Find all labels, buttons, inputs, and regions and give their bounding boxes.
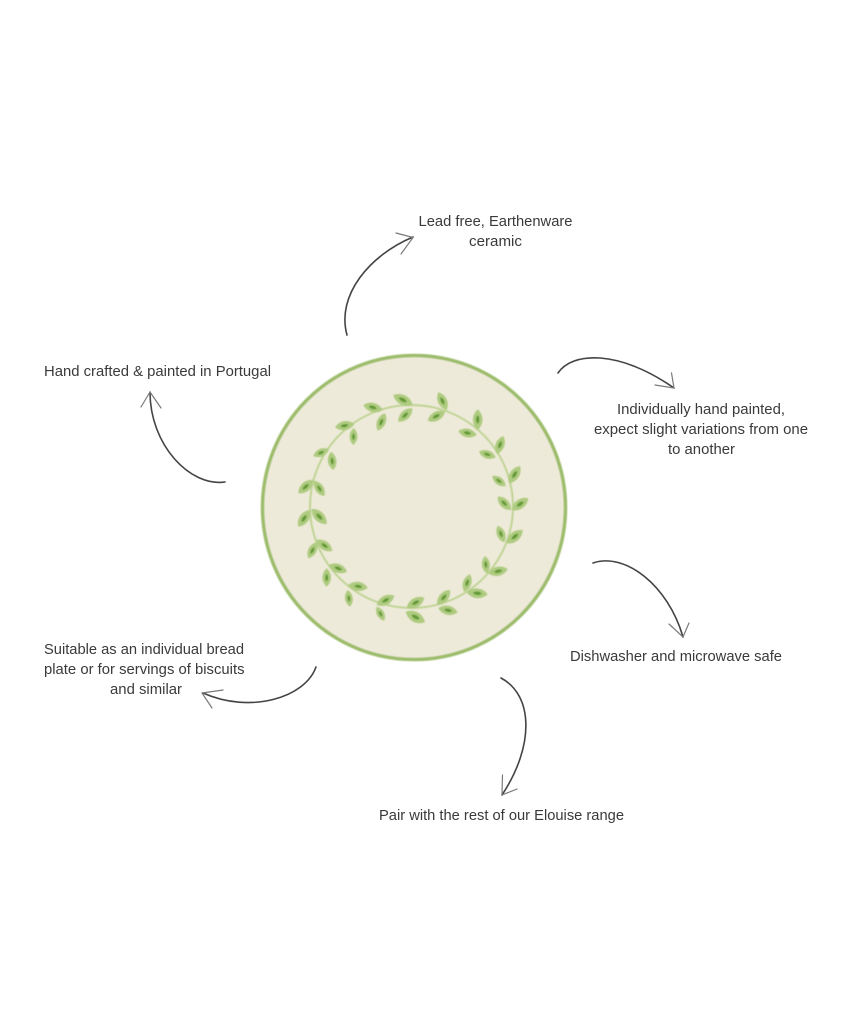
text: suitable as bread plate: and similar — [110, 682, 182, 698]
text: individually hand painted — [594, 402, 808, 458]
arrow: to dishwasher label — [593, 561, 689, 637]
text: suitable as bread plate — [44, 642, 244, 698]
text: individually hand painted: Individually hand painted, — [617, 402, 785, 418]
arrow: to hand crafted label — [141, 392, 225, 482]
wreath of leaves — [294, 390, 531, 627]
text: suitable as bread plate: plate or for servings of biscuits — [44, 662, 244, 678]
arrow: to bread plate label — [202, 667, 316, 708]
wreath stem — [310, 405, 513, 608]
text: lead free earthenware ceramic: Lead free, Earthenware — [418, 214, 572, 230]
arrow: to elouise range label — [501, 678, 526, 795]
text: lead free earthenware ceramic: ceramic — [469, 234, 522, 250]
text: pair with elouise range: Pair with the rest of our Elouise range — [379, 808, 624, 824]
plate — [262, 356, 566, 660]
text: dishwasher and microwave safe: Dishwasher and microwave safe — [570, 649, 782, 665]
text: suitable as bread plate: Suitable as an individual bread — [44, 642, 244, 658]
text: lead free earthenware ceramic — [418, 214, 572, 250]
plate rim — [262, 356, 566, 660]
text: hand crafted in portugal: Hand crafted & painted in Portugal — [44, 364, 271, 380]
arrow: to lead free label — [345, 233, 413, 335]
arrow: to hand painted label — [558, 358, 674, 388]
text: individually hand painted: to another — [668, 442, 735, 458]
text: individually hand painted: expect slight variations from one — [594, 422, 808, 438]
